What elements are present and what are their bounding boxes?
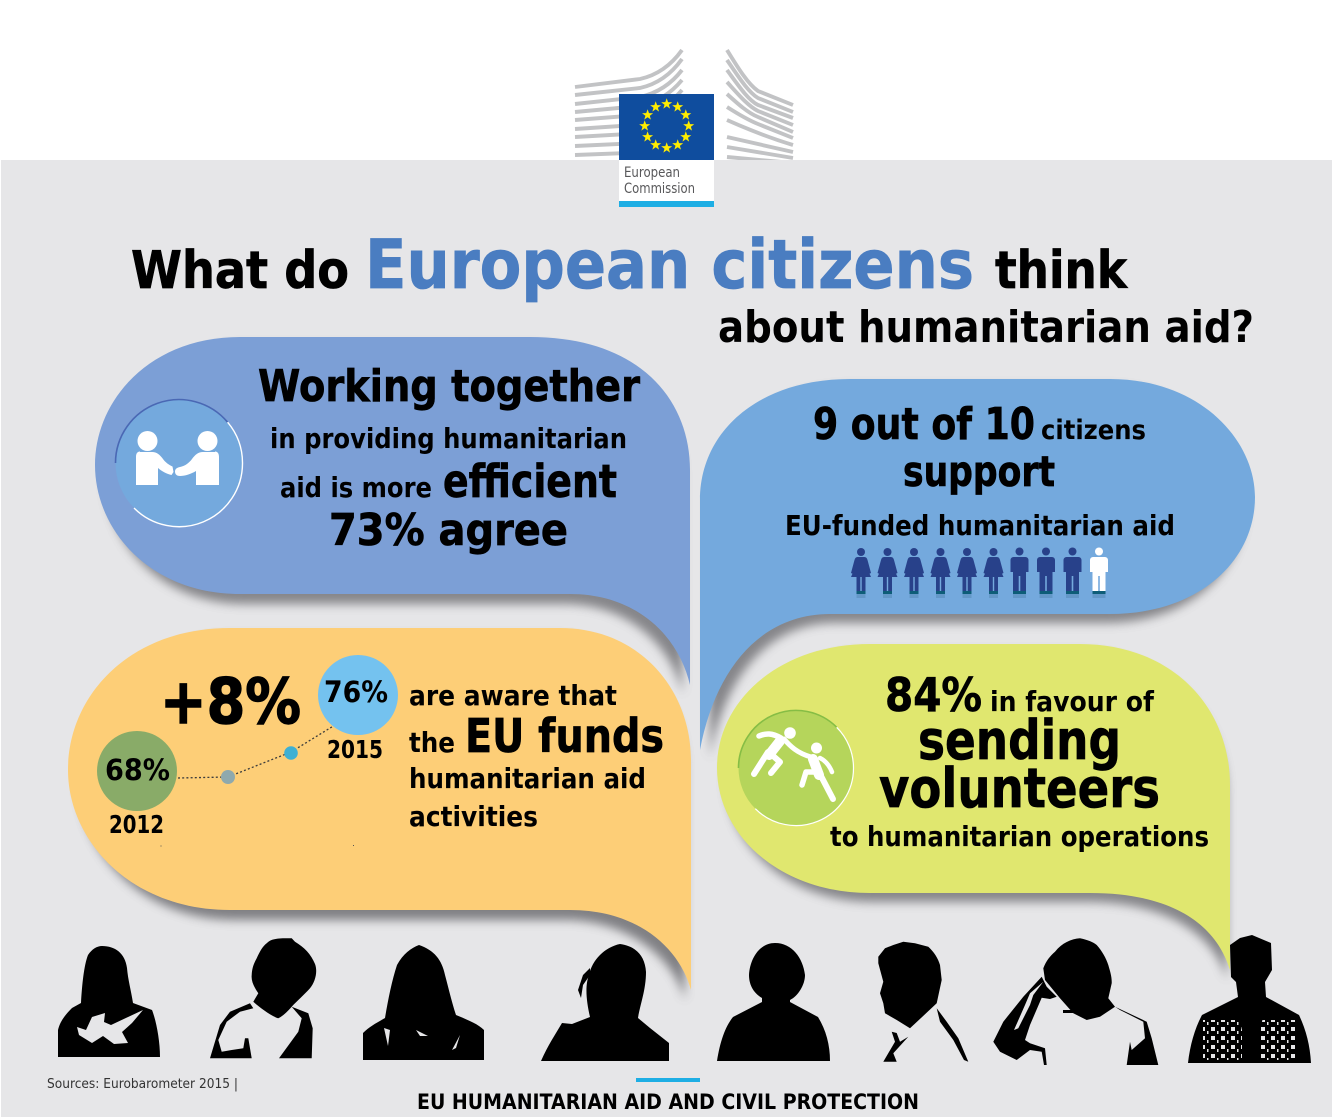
- logo flag: [619, 94, 714, 160]
- icon: helping climber in circle: [738, 710, 854, 826]
- panel: speech bubble left blue, working together: [95, 337, 690, 694]
- text: are aware that: are aware that: [409, 679, 617, 712]
- text: aid is more efficient: [280, 455, 617, 508]
- silhouette 2: [210, 938, 316, 1058]
- text: aid is more efficient: efficient: [443, 455, 617, 508]
- text: EU-funded humanitarian aid: EU-funded humanitarian aid: [785, 509, 1175, 542]
- text: volunteers: volunteers: [879, 757, 1160, 820]
- text: aid is more efficient: aid is more: [280, 471, 432, 504]
- logo stars: [639, 98, 694, 153]
- line chart: 68% in 2012 to 76% in 2015: [97, 655, 398, 839]
- silhouette 8: [1188, 935, 1311, 1063]
- text: the EU funds: the: [409, 726, 455, 759]
- text: humanitarian aid: humanitarian aid: [409, 762, 646, 795]
- silhouette 3: [363, 945, 484, 1060]
- data point 2015: [318, 655, 398, 764]
- data point 2015: 76%: [324, 675, 388, 709]
- headline: 9 out of 10 citizens: 9 out of 10: [813, 399, 1035, 450]
- panel: speech bubble green, sending volunteers: [717, 644, 1230, 979]
- text: in providing humanitarian: in providing humanitarian: [270, 422, 627, 455]
- headline: 84% in favour of: 84%: [885, 668, 982, 722]
- headline: 84% in favour of: in favour of: [990, 685, 1155, 718]
- text: +8%: +8%: [160, 665, 301, 738]
- footer accent bar: [636, 1078, 700, 1082]
- icon: row of ten people, nine blue and one white: [851, 548, 1108, 598]
- text: support: support: [903, 447, 1055, 496]
- data point 2012: [97, 731, 177, 839]
- title: European citizens: [365, 226, 974, 305]
- icon: handshake in circle: [116, 400, 243, 527]
- silhouette 6: [878, 942, 968, 1062]
- logo building: left wing: [575, 50, 682, 155]
- text: the EU funds: EU funds: [465, 709, 664, 763]
- silhouette 1: [58, 946, 160, 1057]
- text: activities: activities: [409, 800, 538, 833]
- text: sending: sending: [918, 709, 1121, 772]
- headline: 9 out of 10 citizens: citizens: [1041, 415, 1146, 446]
- silhouette 7: [993, 938, 1158, 1065]
- text: to humanitarian operations: to humanitarian operations: [830, 820, 1209, 853]
- silhouette 5: [717, 943, 830, 1061]
- silhouettes of eight citizens: [58, 935, 1311, 1065]
- data point 2012: 68%: [105, 753, 170, 787]
- panel: speech bubble orange, EU funds awareness: [68, 628, 691, 1000]
- logo label panel: [619, 160, 714, 201]
- title: about humanitarian aid?: [718, 302, 1254, 353]
- title: [131, 226, 1254, 353]
- European Commission logo: [575, 50, 793, 207]
- data point 2012: 2012: [109, 810, 164, 839]
- silhouette 4: [541, 944, 669, 1061]
- title: think: [995, 241, 1128, 301]
- logo building: right wing: [727, 50, 793, 163]
- logo cyan strip: [619, 201, 714, 207]
- headline: 84% in favour of: [885, 668, 1155, 722]
- source note: Sources: Eurobarometer 2015 |: [47, 1077, 238, 1092]
- footer label: EU HUMANITARIAN AID AND CIVIL PROTECTION: [417, 1090, 919, 1114]
- logo wordmark: European: [624, 165, 680, 181]
- title: What do: [131, 241, 349, 301]
- panel: speech bubble right blue, 9 out of 10: [700, 379, 1255, 758]
- logo wordmark: [624, 165, 695, 197]
- data point 2015: 2015: [327, 735, 383, 764]
- text: Working together: Working together: [258, 361, 640, 412]
- text: the EU funds: [409, 709, 664, 763]
- logo wordmark: Commission: [624, 181, 695, 197]
- text: 73% agree: 73% agree: [329, 505, 568, 556]
